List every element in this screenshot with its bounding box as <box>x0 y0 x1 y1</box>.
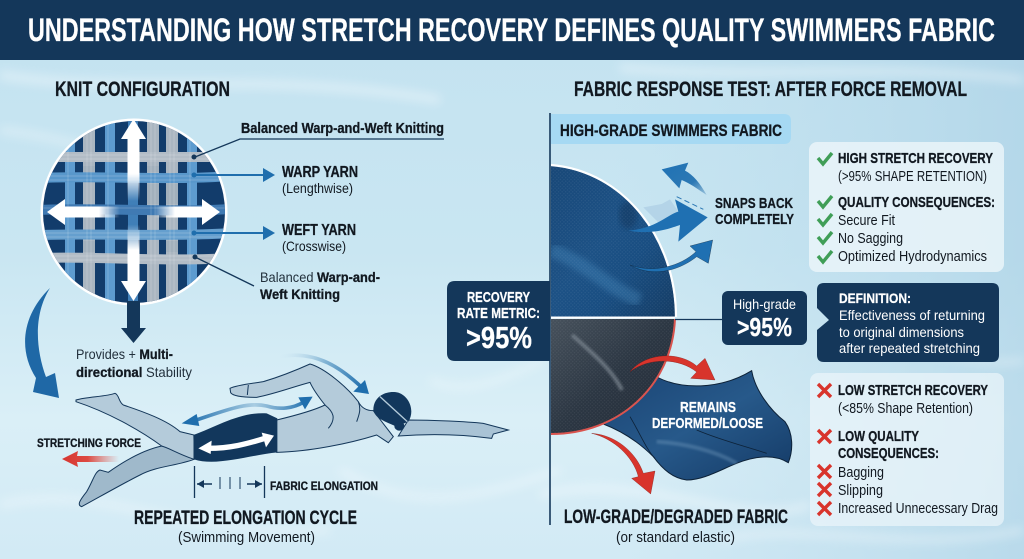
caption: repeated elongation cycle: (Swimming Movement) <box>178 529 315 546</box>
callout: warp yarn: (Lengthwise) <box>282 180 353 196</box>
cross icons <box>818 384 831 515</box>
fabric disc: high-grade half <box>551 160 681 320</box>
swim trunks <box>193 413 277 462</box>
knit weave circle <box>40 118 228 306</box>
box: definition: to original dimensions <box>839 324 964 340</box>
caption: repeated elongation cycle: REPEATED ELONGATION CYCLE <box>134 508 357 529</box>
heading: knit configuration: KNIT CONFIGURATION <box>55 78 230 101</box>
vertical axis <box>549 113 551 525</box>
box: definition: after repeated stretching <box>839 340 980 356</box>
lower leg <box>79 446 194 507</box>
callout: balanced knitting top: Balanced Warp-and-Weft Knitting <box>241 121 444 137</box>
arrow: middle <box>628 199 708 242</box>
callout: weft yarn: WEFT YARN <box>282 222 356 239</box>
arrow: blue over back <box>182 397 313 426</box>
panel: high recovery consequences: Optimized Hydrodynamics <box>838 249 987 265</box>
callout: balanced knitting top <box>192 121 444 160</box>
label: snaps back: SNAPS BACK <box>715 195 793 212</box>
panel: high recovery consequences: (>95% SHAPE RETENTION) <box>838 169 987 185</box>
label: snaps back <box>715 195 794 228</box>
callout: balanced knitting lower <box>192 254 380 302</box>
callout: weft yarn: (Crosswise) <box>282 238 346 254</box>
arrow: bottom <box>630 240 713 272</box>
panel: high recovery consequences <box>809 142 1004 272</box>
label: stretching force: STRETCHING FORCE <box>37 436 141 450</box>
caption: low-grade fabric <box>564 507 788 546</box>
callout: weft yarn <box>192 222 356 254</box>
arrow: red stretching force <box>62 451 119 467</box>
horizontal white arrow <box>47 199 220 225</box>
label: remains deformed: DEFORMED/LOOSE <box>652 416 763 432</box>
caption: repeated elongation cycle <box>134 508 357 546</box>
vertical white arrow <box>121 119 146 301</box>
check icons <box>818 153 832 262</box>
white stretch arrow <box>198 433 274 454</box>
panel: low recovery consequences: Increased Unnecessary Drag <box>838 501 998 517</box>
panel: low recovery consequences: Slipping <box>838 483 883 499</box>
callout: balanced knitting lower: Weft Knitting <box>260 286 340 302</box>
deformed flag fabric <box>603 371 792 480</box>
box: definition: Effectiveness of returning <box>839 307 985 323</box>
panel: high recovery consequences: Secure Fit <box>838 213 895 229</box>
caption: low-grade fabric: LOW-GRADE/DEGRADED FABRIC <box>564 507 788 528</box>
recovery arrows: snap back <box>628 163 713 272</box>
caption: low-grade fabric: (or standard elastic) <box>616 529 735 546</box>
label: snaps back: COMPLETELY <box>715 211 794 228</box>
red arrows <box>592 356 715 494</box>
fabric disc: low-grade half <box>551 318 681 438</box>
callout: balanced knitting lower: Balanced Warp-and- <box>260 269 380 285</box>
light fold <box>643 199 678 224</box>
arrow: top <box>662 163 707 195</box>
divider line <box>551 316 675 318</box>
box: recovery rate metric: >95% <box>466 320 532 355</box>
upper leg <box>76 393 194 459</box>
header band <box>0 0 1024 60</box>
text: multi-directional stability: Provides + Multi- <box>76 346 173 362</box>
callout: warp yarn <box>192 164 358 196</box>
panel: low recovery consequences: (<85% Shape Retention) <box>838 401 973 417</box>
torso and raised arm <box>230 364 393 452</box>
arrow: blue over shoulder <box>280 355 369 394</box>
callout: warp yarn: WARP YARN <box>282 164 358 181</box>
box: high-grade value <box>722 291 807 345</box>
box: definition <box>817 283 999 362</box>
box: recovery rate metric <box>447 281 550 361</box>
swim cap <box>373 392 411 427</box>
banner: high-grade fabric: HIGH-GRADE SWIMMERS FABRIC <box>560 121 782 140</box>
box: recovery rate metric: RECOVERY <box>467 289 530 306</box>
banner: high-grade fabric <box>551 114 791 144</box>
panel: low recovery consequences: CONSEQUENCES: <box>838 445 939 462</box>
text: multi-directional stability <box>76 346 192 380</box>
fabric elongation dimension <box>194 466 378 498</box>
box: high-grade value: >95% <box>737 312 792 342</box>
connector to high-grade box <box>675 318 724 320</box>
panel: low recovery consequences: LOW QUALITY <box>838 428 919 445</box>
arrow: curved blue to swimmer <box>25 288 59 398</box>
arrow: down from knit <box>121 301 146 343</box>
panel: low recovery consequences <box>810 373 1004 526</box>
panel: high recovery consequences: No Sagging <box>838 231 903 247</box>
box: high-grade value: High-grade <box>733 296 796 312</box>
label: remains deformed <box>652 400 763 432</box>
panel: low recovery consequences: Bagging <box>838 465 884 481</box>
text: multi-directional stability: directional Stability <box>76 364 192 380</box>
swimmer figure <box>76 355 508 507</box>
label: remains deformed: REMAINS <box>680 400 736 416</box>
box: definition: DEFINITION: <box>839 290 911 306</box>
fabric elongation dimension: FABRIC ELONGATION <box>270 479 378 493</box>
extended arm <box>398 420 508 438</box>
box: recovery rate metric: RATE METRIC: <box>457 305 540 322</box>
